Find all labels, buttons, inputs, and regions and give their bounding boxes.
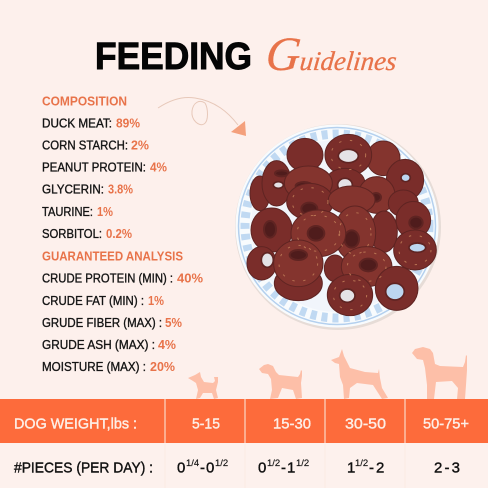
weight: 30-50: 30-50 <box>345 416 386 432</box>
item: duck meat: 89% <box>116 116 140 130</box>
item: corn starch: 2% <box>131 138 149 152</box>
composition list <box>42 94 167 241</box>
plate <box>235 124 441 330</box>
item: crude ash: GRUDE ASH (MAX) : <box>42 338 155 352</box>
pieces: 30-50 lbs <box>347 458 384 476</box>
table row band <box>0 444 488 488</box>
arrow pointing to plate <box>158 97 246 136</box>
pieces: 30-50 lbs: - <box>369 460 374 476</box>
item: peanut protein: 4% <box>150 160 167 174</box>
item: crude ash: 4% <box>158 338 176 352</box>
pieces: 15-30 lbs: - <box>281 460 286 476</box>
pieces: 15-30 lbs: 1 <box>287 460 295 476</box>
row label: pieces per day: #PIECES (PER DAY) : <box>14 460 153 476</box>
item: crude fiber: 5% <box>165 316 182 330</box>
pieces: 5-15 lbs <box>177 458 228 476</box>
row label: dog weight: DOG WEIGHT,lbs : <box>14 416 137 432</box>
title word: Guidelines: Guidelines <box>263 28 400 81</box>
feeding table <box>0 399 488 488</box>
item: glycerin: GLYCERIN: <box>42 182 104 196</box>
item: crude protein: CRUDE PROTEIN (MIN) : <box>42 272 173 286</box>
pieces: 15-30 lbs: 1/2 <box>267 458 280 469</box>
pieces: 5-15 lbs: 1/4 <box>186 458 199 469</box>
pieces: 5-15 lbs: 0 <box>177 460 185 476</box>
pieces: 30-50 lbs: 2 <box>376 460 384 476</box>
icon: large dog <box>331 349 388 399</box>
guaranteed analysis list <box>42 248 203 374</box>
title <box>95 28 400 81</box>
item: glycerin: 3.8% <box>108 182 133 196</box>
duck rings <box>247 134 436 316</box>
item: duck meat: DUCK MEAT: <box>42 116 112 130</box>
weight: 5-15: 5-15 <box>192 416 220 432</box>
icon: medium dog <box>259 364 302 399</box>
pieces: 15-30 lbs <box>258 458 309 476</box>
plate of duck rings <box>235 124 441 330</box>
icon: extra large dog <box>412 347 467 399</box>
item: sorbitol: 0.2% <box>106 227 132 241</box>
item: crude fat: CRUDE FAT (MIN) : <box>42 294 144 308</box>
pieces: 15-30 lbs: 1/2 <box>296 458 309 469</box>
pieces: 30-50 lbs: 1/2 <box>355 458 368 469</box>
item: corn starch: CORN STARCH: <box>42 138 128 152</box>
title word: FEEDING: FEEDING <box>95 36 252 78</box>
item: taurine: 1% <box>97 205 113 219</box>
item: moisture: 20% <box>150 360 175 374</box>
item: taurine: TAURINE: <box>42 205 93 219</box>
pieces: 15-30 lbs: 0 <box>258 460 266 476</box>
heading: composition: COMPOSITION <box>42 94 127 108</box>
icon: small dog <box>188 372 218 399</box>
dog silhouettes <box>188 347 467 399</box>
item: peanut protein: PEANUT PROTEIN: <box>42 160 146 174</box>
heading: guaranteed analysis: GUARANTEED ANALYSIS <box>42 248 183 264</box>
table header band <box>0 399 488 443</box>
pieces: 5-15 lbs: 0 <box>206 460 214 476</box>
weight: 50-75+: 50-75+ <box>423 416 469 432</box>
pieces: 30-50 lbs: 1 <box>347 460 355 476</box>
item: moisture: MOISTURE (MAX) : <box>42 360 146 374</box>
pieces: 5-15 lbs: 1/2 <box>215 458 228 469</box>
item: crude fiber: GRUDE FIBER (MAX) : <box>42 316 162 330</box>
pieces: 50-75+ lbs: 2 - 3 <box>434 460 460 476</box>
item: crude protein: 40% <box>177 272 203 286</box>
weight: 15-30: 15-30 <box>273 416 311 432</box>
item: crude fat: 1% <box>148 294 164 308</box>
pieces: 5-15 lbs: - <box>200 460 205 476</box>
item: sorbitol: SORBITOL: <box>42 227 102 241</box>
